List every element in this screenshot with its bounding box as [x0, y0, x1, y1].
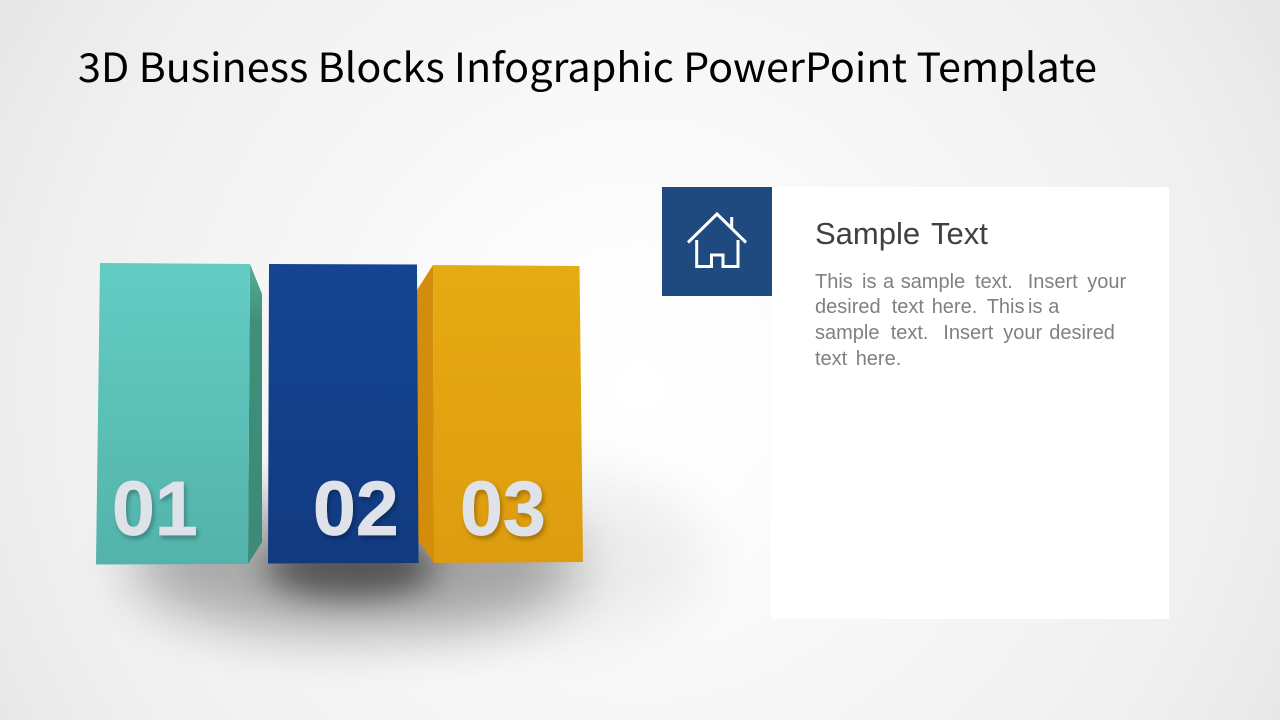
body text: sample — [815, 322, 885, 344]
number 01: 01 — [112, 466, 198, 552]
body text: text — [815, 348, 853, 370]
body text: here. — [856, 348, 901, 370]
body text: This — [815, 271, 858, 293]
body text: text. — [975, 271, 1018, 293]
icon tile: house — [662, 187, 772, 296]
body text: is — [862, 271, 882, 293]
heading: Text — [931, 216, 988, 251]
number 02: 02 — [313, 466, 399, 552]
title: 3D Business Blocks Infographic PowerPoint Template — [78, 36, 1097, 94]
body text: Insert — [1028, 271, 1083, 293]
text panel — [771, 187, 1169, 619]
body text: desired — [815, 296, 886, 318]
block shadow — [130, 470, 705, 640]
body text: text — [892, 296, 929, 318]
number 03: 03 — [460, 466, 546, 552]
body text: here. — [932, 296, 983, 318]
body text: Insert — [943, 322, 999, 344]
body text: This — [987, 296, 1030, 318]
body text: your — [1003, 322, 1048, 344]
body text: a — [1048, 296, 1060, 318]
icon: house — [688, 214, 746, 266]
block 02 blue — [268, 264, 418, 564]
block 03 yellow — [417, 265, 583, 563]
heading: Sample — [815, 216, 929, 251]
body text: your — [1087, 271, 1127, 293]
body text: is — [1028, 296, 1048, 318]
body text: sample — [901, 271, 971, 293]
body text: text. — [891, 322, 934, 344]
block 01 teal — [96, 263, 262, 564]
body text: desired — [1049, 322, 1115, 344]
body text: a — [883, 271, 900, 293]
body text — [815, 271, 1127, 370]
